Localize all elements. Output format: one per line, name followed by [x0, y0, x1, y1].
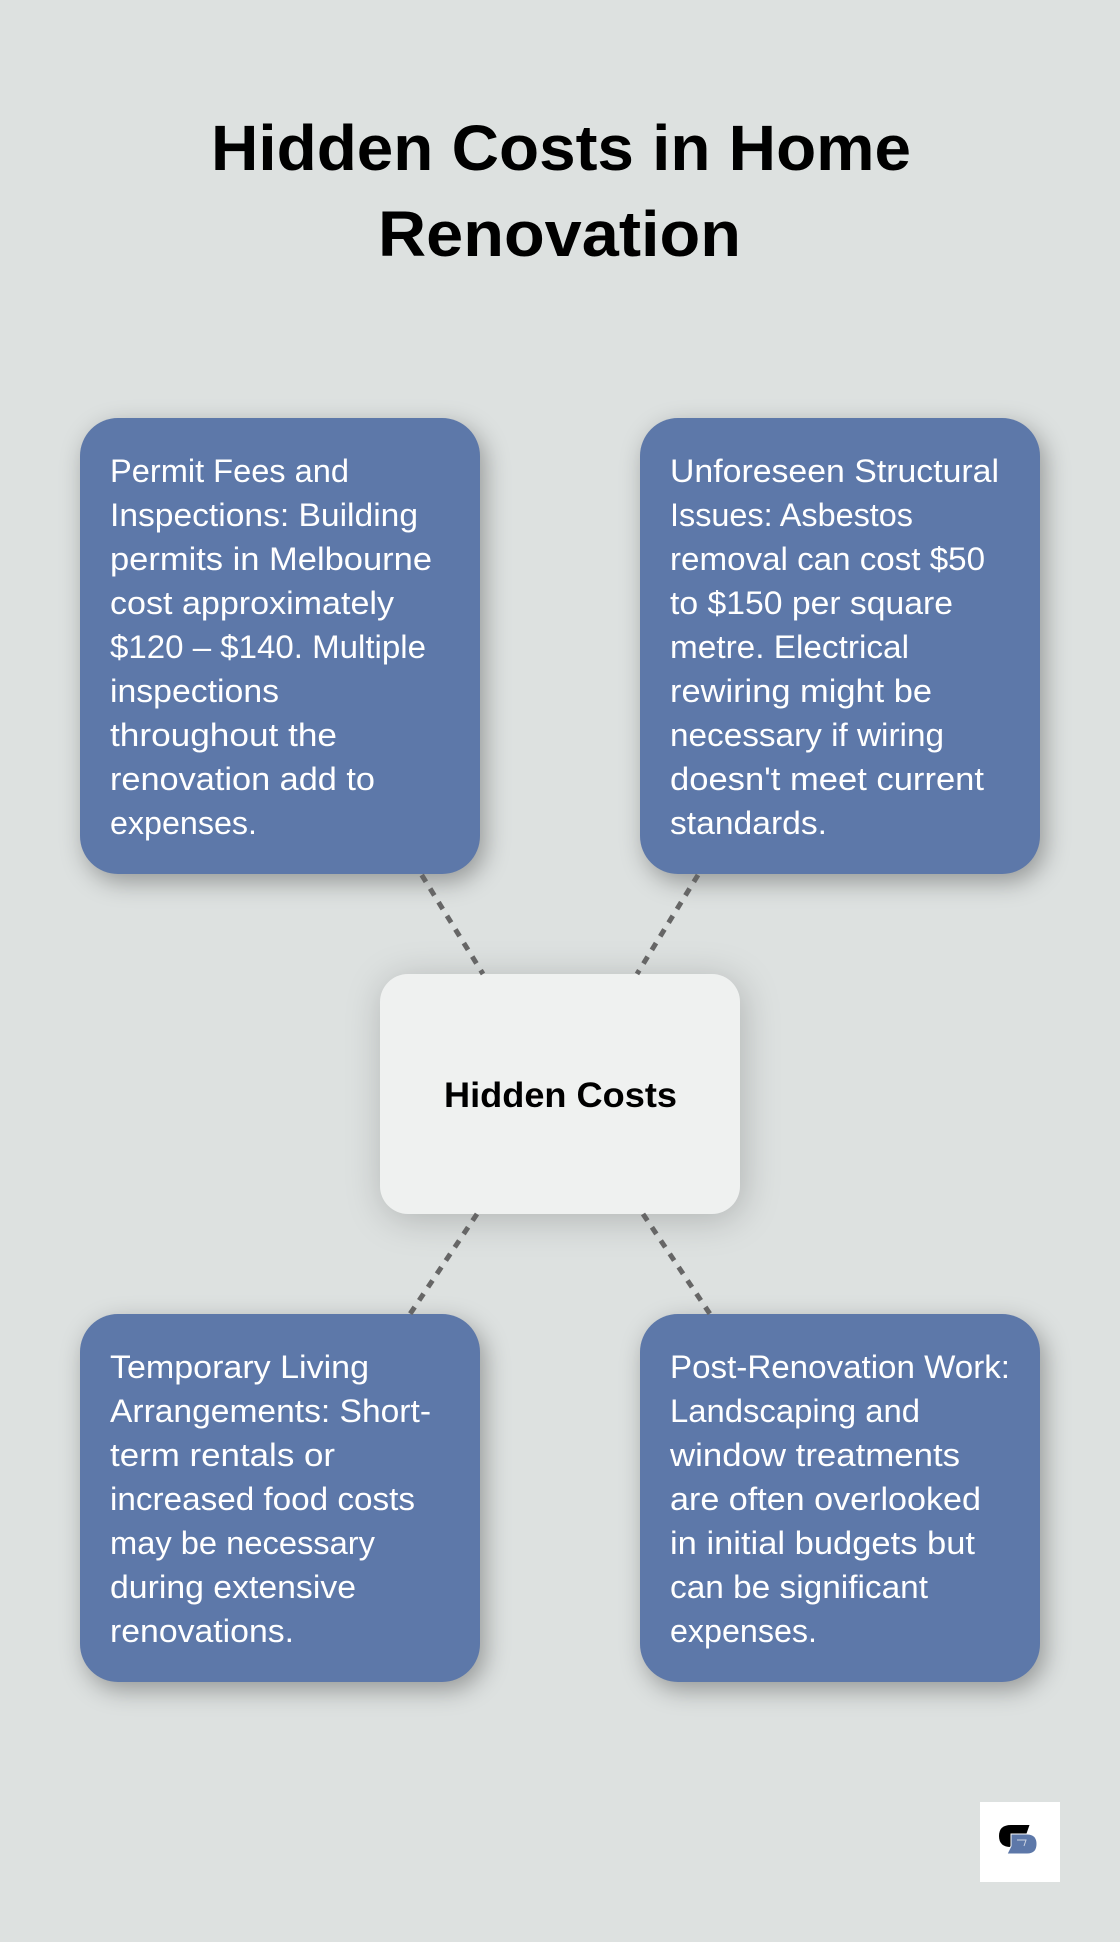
card text: permits in Melbourne	[110, 541, 432, 577]
card text: Inspections: Building	[110, 497, 418, 533]
card text: inspections	[110, 673, 279, 709]
card text: Issues: Asbestos	[670, 497, 913, 533]
connector: permit fees to center	[422, 875, 483, 974]
card background	[80, 1314, 480, 1682]
central node: hidden costs	[380, 974, 740, 1214]
card text: expenses.	[670, 1613, 817, 1649]
card text: Landscaping and	[670, 1393, 920, 1429]
card text: metre. Electrical	[670, 629, 909, 665]
node background	[380, 974, 740, 1214]
card text: Unforeseen Structural	[670, 453, 999, 489]
card text: cost approximately	[110, 585, 394, 621]
card text: $120 – $140. Multiple	[110, 629, 426, 665]
title: Hidden Costs in Home	[211, 112, 911, 184]
card text	[110, 453, 432, 841]
card text: window treatments	[669, 1437, 960, 1473]
card background	[640, 1314, 1040, 1682]
logo background	[980, 1802, 1060, 1882]
card text: are often overlooked	[670, 1481, 981, 1517]
card text: increased food costs	[110, 1481, 415, 1517]
card text: in initial budgets but	[670, 1525, 975, 1561]
card text: Permit Fees and	[110, 453, 349, 489]
card text: doesn't meet current	[670, 761, 984, 797]
card text: Temporary Living	[110, 1349, 369, 1385]
card text: necessary if wiring	[670, 717, 944, 753]
title: Renovation	[378, 198, 741, 270]
card text: to $150 per square	[670, 585, 953, 621]
card text: removal can cost $50	[670, 541, 985, 577]
logo	[980, 1802, 1060, 1882]
card text: expenses.	[110, 805, 257, 841]
card text: during extensive	[110, 1569, 356, 1605]
card text: Arrangements: Short-	[110, 1393, 431, 1429]
panel: permit fees and inspections	[80, 418, 480, 874]
card text: Post-Renovation Work:	[670, 1349, 1010, 1385]
logo mark	[999, 1825, 1037, 1854]
card text: throughout the	[110, 717, 337, 753]
panel: temporary living arrangements	[80, 1314, 480, 1682]
card background	[640, 418, 1040, 874]
card text: renovation add to	[110, 761, 375, 797]
card text: may be necessary	[110, 1525, 375, 1561]
card text: rewiring might be	[670, 673, 932, 709]
node label: Hidden Costs	[444, 1076, 677, 1115]
card text	[110, 1349, 431, 1649]
connector: post-renovation to center	[643, 1214, 710, 1314]
card text	[670, 453, 999, 841]
card text: can be significant	[670, 1569, 928, 1605]
panel: unforeseen structural issues	[640, 418, 1040, 874]
card text: standards.	[670, 805, 827, 841]
card background	[80, 418, 480, 874]
card text	[669, 1349, 1010, 1649]
card text: renovations.	[110, 1613, 294, 1649]
connector: temporary living to center	[410, 1214, 477, 1314]
title	[211, 112, 911, 270]
panel: post-renovation work	[640, 1314, 1040, 1682]
card text: term rentals or	[110, 1437, 335, 1473]
connector: structural issues to center	[637, 875, 698, 974]
